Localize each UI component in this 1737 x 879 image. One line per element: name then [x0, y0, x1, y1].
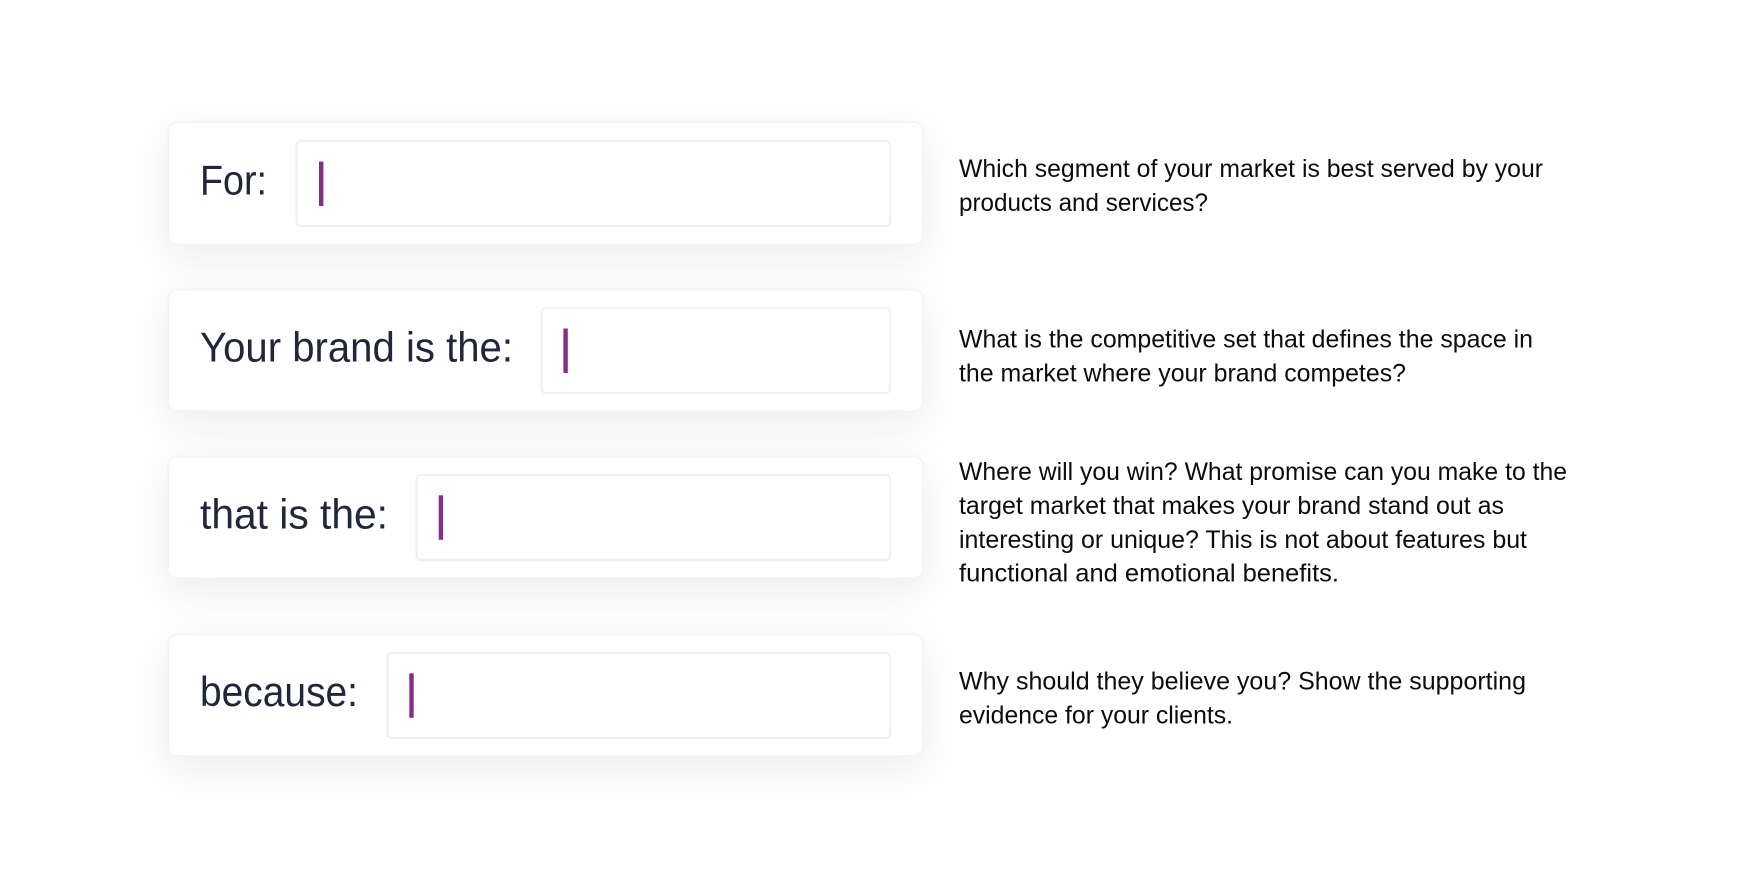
- text cursor: that is the: [439, 495, 443, 540]
- input field: For: [296, 141, 890, 226]
- label: because: because:: [200, 668, 358, 715]
- card: For: [168, 122, 923, 244]
- label: For: For:: [200, 156, 267, 204]
- input field: Your brand is the: [542, 308, 890, 393]
- text cursor: Your brand is the: [563, 328, 568, 373]
- text block: promise question: functional and emotional benefits.: [959, 560, 1339, 588]
- text block: evidence question: [959, 667, 1526, 729]
- text block: market segment question: Which segment of your market is best served by your: [959, 155, 1543, 183]
- text block: market segment question: products and services?: [959, 189, 1208, 217]
- text block: promise question: Where will you win? What promise can you make to the: [959, 458, 1567, 486]
- label: that is the: that is the:: [200, 490, 388, 537]
- input field: that is the: [416, 475, 890, 560]
- card: Your brand is the: [168, 290, 923, 411]
- text block: promise question: interesting or unique? This is not about features but: [959, 526, 1527, 554]
- panel: Your brand is the row: [168, 290, 923, 411]
- text cursor: For: [319, 162, 323, 206]
- panel: because row: [168, 634, 923, 756]
- text block: competitive set question: the market where your brand competes?: [959, 359, 1406, 387]
- text block: competitive set question: [959, 325, 1533, 387]
- text block: market segment question: [959, 155, 1543, 217]
- label: Your brand is the: Your brand is the:: [200, 324, 513, 370]
- panel: that is the row: [168, 456, 923, 578]
- panel: For row: [168, 122, 923, 244]
- text block: promise question: [959, 458, 1567, 588]
- text block: evidence question: Why should they believe you? Show the supporting: [959, 667, 1526, 695]
- text block: competitive set question: What is the competitive set that defines the space in: [959, 325, 1533, 353]
- card: because: [168, 634, 923, 756]
- card: that is the: [168, 456, 923, 578]
- text block: evidence question: evidence for your clients.: [959, 701, 1233, 729]
- text block: promise question: target market that makes your brand stand out as: [959, 492, 1504, 520]
- input field: because: [388, 653, 890, 738]
- text cursor: because: [409, 673, 414, 718]
